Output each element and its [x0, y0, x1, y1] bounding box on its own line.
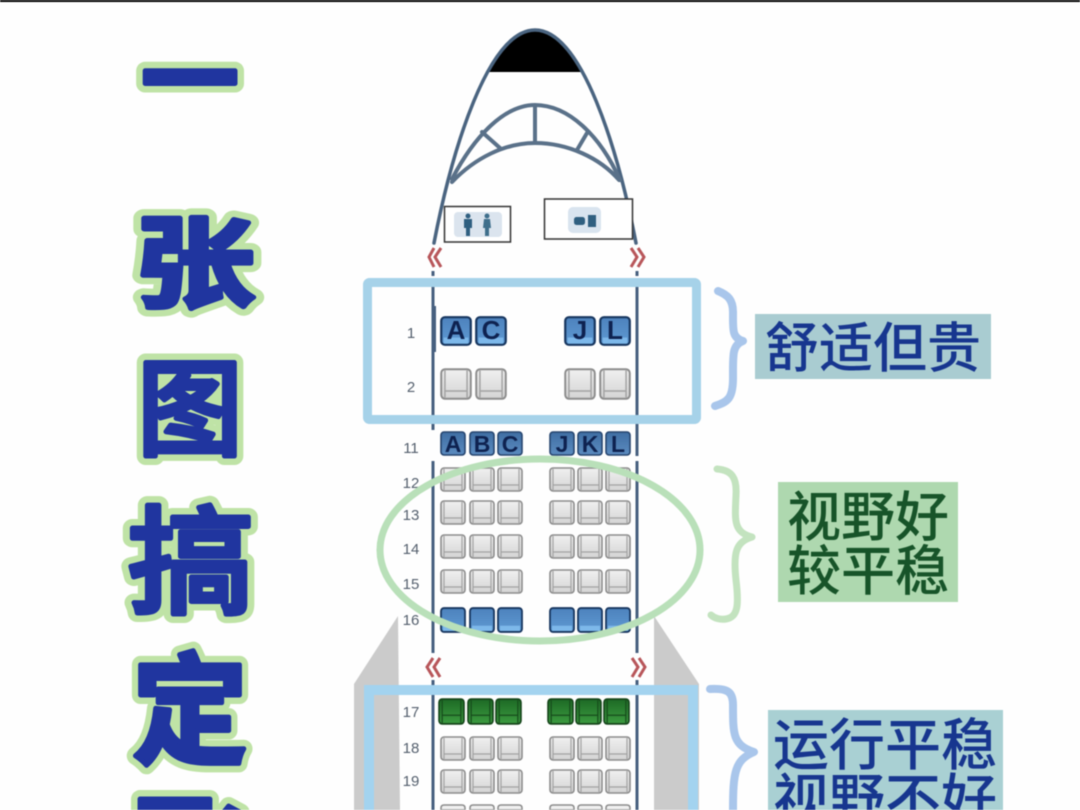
label: good view, fairly stable: 较平稳: [787, 542, 949, 602]
aircraft nose: [434, 30, 636, 243]
wing: right: [654, 616, 699, 810]
fuselage outline: [434, 30, 636, 243]
seats: row 11: B: [474, 431, 490, 457]
galley box: [544, 199, 632, 239]
title character 定: 定: [132, 646, 248, 780]
seats: row 11: K: [582, 431, 599, 457]
title character 图: 图: [137, 353, 243, 470]
seats: row 11: [441, 431, 630, 457]
row numbers: [403, 325, 419, 790]
seats: row 15: [441, 570, 630, 593]
seats: row 13: [441, 501, 630, 524]
seats: row 16: [441, 608, 630, 632]
exit arrows: mid: [427, 658, 645, 677]
row numbers: 17: [403, 704, 419, 721]
seats: row 1: C: [482, 315, 501, 345]
row numbers: 12: [403, 475, 419, 492]
title character 张: 张: [135, 211, 255, 321]
seats: row 2: [441, 369, 630, 399]
highlight box: front rows: [368, 282, 696, 420]
label: comfortable but expensive: 舒适但贵: [765, 319, 981, 379]
row numbers: 11: [403, 440, 419, 457]
title: vertical heading: [128, 27, 255, 810]
cockpit black cap: [489, 30, 581, 73]
seats: row 1: [441, 315, 630, 345]
seats: row 11: C: [502, 431, 518, 457]
highlight ellipse: middle rows: [380, 459, 700, 641]
title character 定: 定: [132, 646, 248, 780]
row numbers: 19: [403, 773, 419, 790]
seats: row 17: [439, 699, 629, 724]
brace: blue top: [715, 291, 743, 406]
label: stable flight, poor view: [768, 710, 1003, 810]
cabin walls: [433, 271, 637, 810]
seats: row 20 (cropped by frame): [441, 805, 630, 810]
seats: row 18: [441, 737, 630, 760]
cockpit windows: [452, 105, 620, 182]
lavatory box: [444, 206, 510, 242]
brace: green: [711, 469, 752, 619]
label: good view, fairly stable: [778, 482, 958, 602]
row numbers: 18: [403, 740, 419, 757]
icon: lavatory: [454, 212, 502, 237]
icon: galley: [568, 207, 601, 233]
seats: row 1: J: [573, 315, 587, 345]
label: good view, fairly stable: 视野好: [787, 488, 949, 548]
title character 搞: 搞: [128, 498, 254, 629]
seats: row 12: [441, 468, 630, 491]
title character 张: 张: [135, 211, 255, 321]
row numbers: 2: [407, 379, 415, 396]
row numbers: 13: [403, 507, 419, 524]
label: stable flight, poor view: 运行平稳: [773, 714, 997, 777]
highlight box: over-wing rows: [369, 690, 693, 810]
seats: row 14: [441, 535, 630, 558]
title character 图: 图: [137, 353, 243, 470]
wing: left: [354, 616, 400, 810]
exit arrows: front: [429, 248, 644, 267]
seats: row 1: A: [447, 315, 466, 345]
title character 一: 一: [142, 27, 238, 136]
row numbers: 16: [403, 612, 419, 629]
seats: row 11: L: [611, 431, 625, 457]
title character 一: 一: [142, 27, 238, 136]
row numbers: 15: [403, 576, 419, 593]
row numbers: 1: [407, 325, 415, 342]
seats: row 11: A: [445, 431, 461, 457]
title character 搞: 搞: [128, 498, 254, 629]
seats: row 19: [441, 770, 630, 793]
row numbers: 14: [403, 541, 419, 558]
seats: row 11: J: [556, 431, 568, 457]
brace: blue bottom: [710, 689, 754, 810]
seats: row 1: L: [607, 315, 623, 345]
